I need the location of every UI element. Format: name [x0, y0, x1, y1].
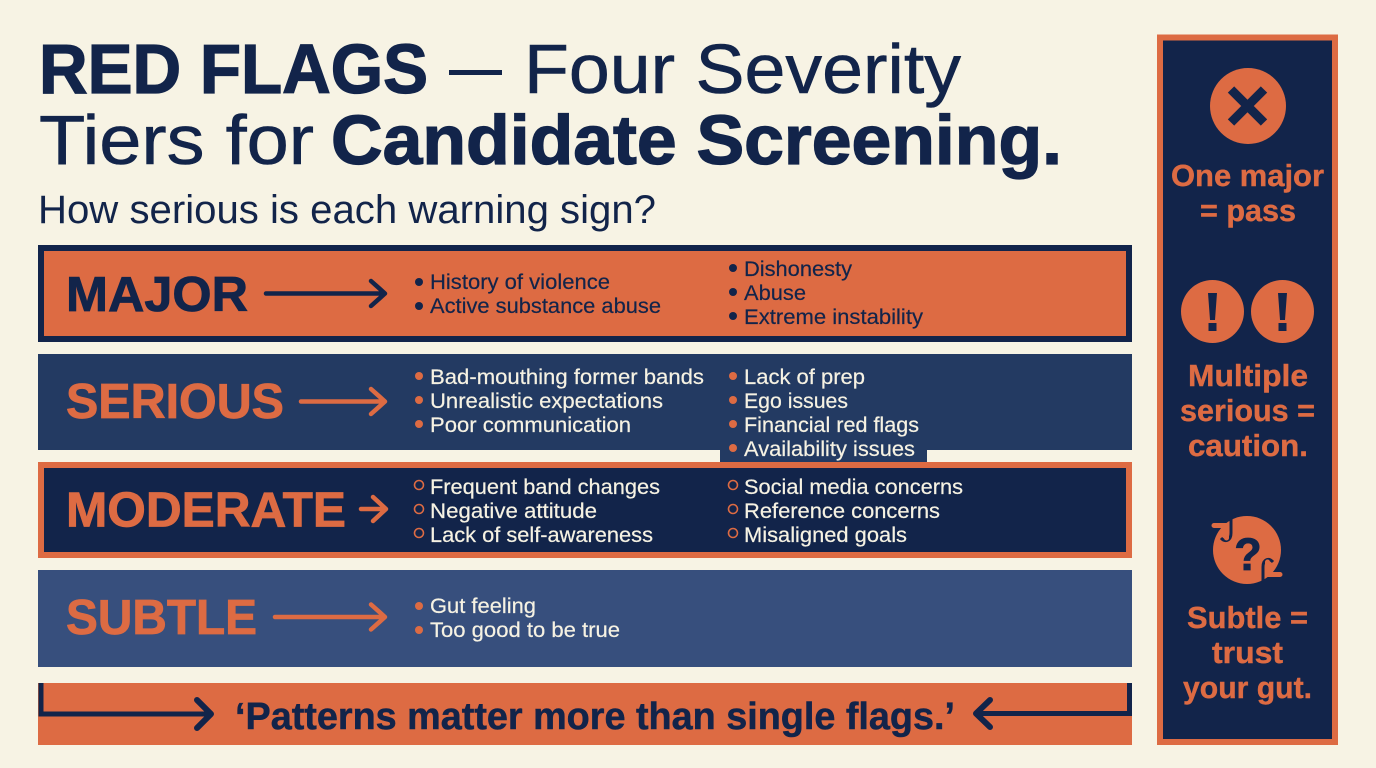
list: moderate right	[728, 475, 963, 547]
icon: x in circle	[1210, 68, 1286, 144]
list: serious left: Bad-mouthing former bands	[430, 365, 704, 389]
list: moderate left	[414, 475, 660, 547]
list: major right: Abuse	[744, 281, 806, 305]
panel: subtle tier	[38, 570, 1132, 667]
list: major left: History of violence	[430, 270, 610, 294]
list: major right: Extreme instability	[744, 305, 923, 329]
list: moderate right: Misaligned goals	[744, 523, 907, 547]
list: serious right: Financial red flags	[744, 413, 919, 437]
list: serious left: Poor communication	[430, 413, 631, 437]
subtitle: How serious is each warning sign?	[38, 188, 656, 232]
panel: verdict sidebar	[1160, 38, 1335, 742]
icon: two exclamation circles	[1181, 280, 1314, 343]
title: RED FLAGS	[39, 30, 428, 108]
list: moderate right: Social media concerns	[744, 475, 963, 499]
icon: question with cycle arrows	[1213, 516, 1281, 584]
list: major left	[415, 270, 661, 318]
text: one major: = pass	[1200, 193, 1296, 228]
arrow: subtle	[275, 604, 385, 630]
list: major right: Dishonesty	[744, 257, 852, 281]
list: moderate left: Frequent band changes	[430, 475, 660, 499]
list: major right	[729, 257, 923, 329]
arrow: serious	[301, 389, 385, 414]
arrow: banner right	[976, 683, 1130, 727]
list: moderate right: Reference concerns	[744, 499, 940, 523]
text: one major	[1171, 158, 1324, 228]
text: one major: One major	[1171, 158, 1324, 193]
title: Candidate Screening.	[331, 101, 1062, 179]
label: subtle: SUBTLE	[66, 591, 257, 645]
text: subtle gut: trust	[1212, 635, 1283, 670]
list: serious left: Unrealistic expectations	[430, 389, 663, 413]
label: major: MAJOR	[66, 268, 248, 322]
label: moderate: MODERATE	[66, 484, 346, 538]
list: subtle: Gut feeling	[430, 594, 536, 618]
panel: major tier	[41, 248, 1129, 339]
text: subtle gut	[1183, 600, 1312, 705]
arrow: moderate	[361, 497, 386, 521]
arrow: banner left	[41, 683, 211, 728]
list: serious right: Ego issues	[744, 389, 848, 413]
title: Tiers for	[39, 101, 314, 179]
list: serious right: Availability issues	[744, 437, 915, 461]
banner: patterns quote	[38, 683, 1132, 745]
list: moderate left: Lack of self-awareness	[430, 523, 653, 547]
title: Four Severity	[524, 30, 961, 108]
arrow: major	[266, 281, 385, 306]
text: multiple serious	[1180, 358, 1315, 463]
label: serious: SERIOUS	[66, 375, 284, 429]
list: serious right: Lack of prep	[744, 365, 865, 389]
list: moderate left: Negative attitude	[430, 499, 597, 523]
quote text: ‘Patterns matter more than single flags.’	[235, 696, 955, 738]
list: subtle	[415, 594, 620, 642]
list: serious right	[729, 365, 919, 461]
icon: question with cycle arrows: ?	[1234, 529, 1262, 580]
text: subtle gut: your gut.	[1183, 670, 1312, 705]
text: subtle gut: Subtle =	[1187, 600, 1308, 635]
list: subtle: Too good to be true	[430, 618, 620, 642]
panel: serious tier	[38, 354, 1132, 462]
text: multiple serious: Multiple	[1188, 358, 1308, 393]
text: multiple serious: serious =	[1180, 393, 1315, 428]
list: serious left	[415, 365, 704, 437]
title	[39, 30, 1062, 179]
panel: moderate tier	[41, 465, 1129, 555]
list: major left: Active substance abuse	[430, 294, 661, 318]
text: multiple serious: caution.	[1188, 428, 1308, 463]
